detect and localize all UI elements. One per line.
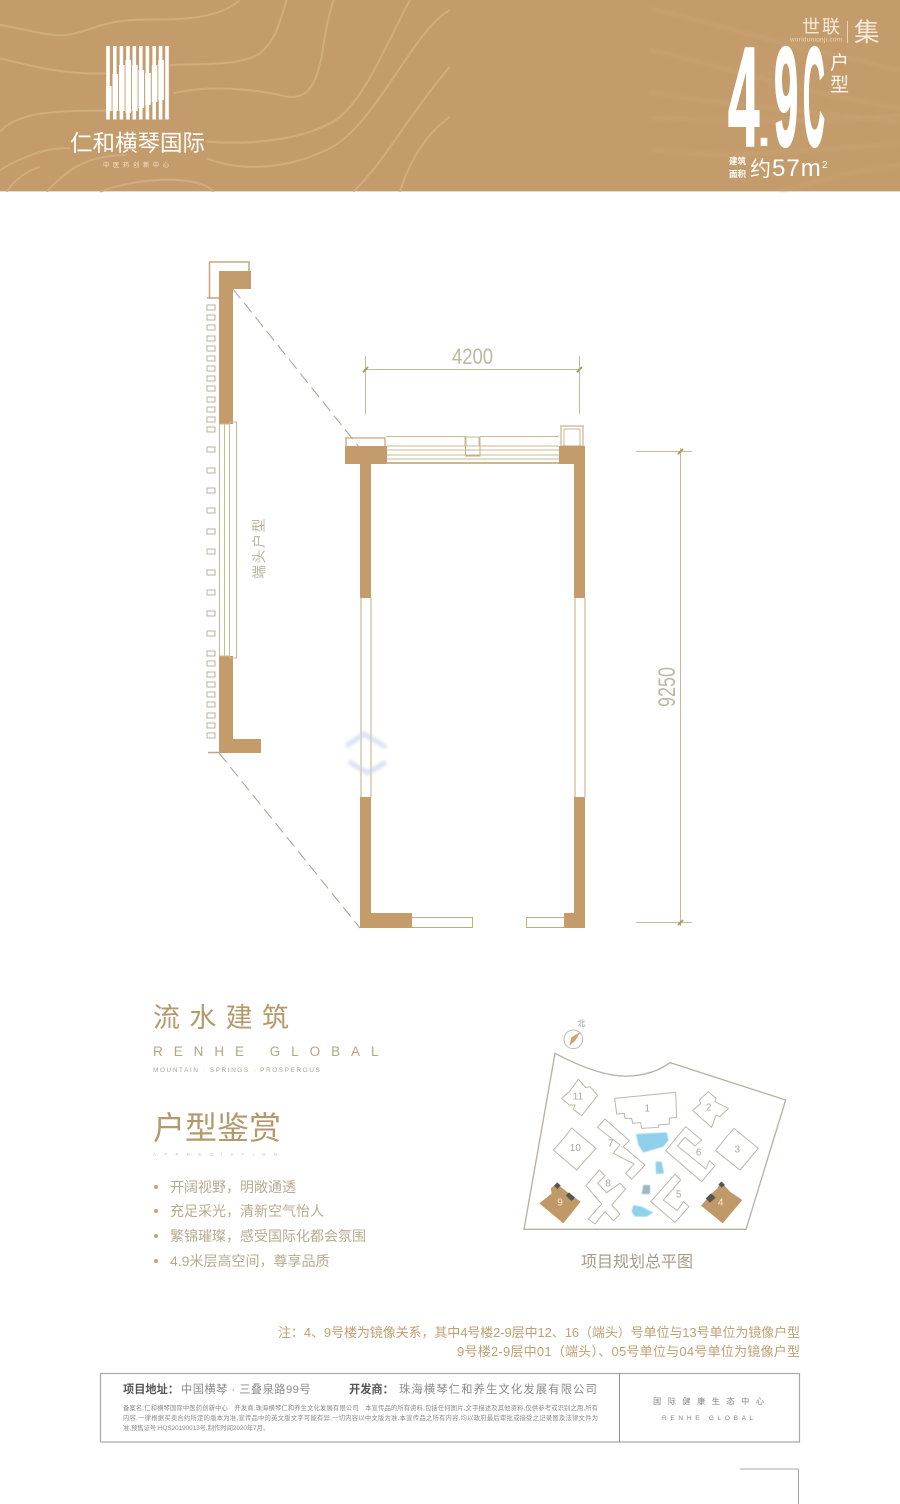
header banner [0, 0, 900, 192]
dimension: depth 9250 [636, 448, 692, 926]
footer right tagline: RENHE GLOBAL [662, 1415, 757, 1422]
building numbers: 8 [605, 1179, 611, 1190]
unit type number [728, 18, 825, 177]
project address and developer: 开发商： [349, 1382, 394, 1396]
logo wordmark [70, 131, 205, 169]
floor area: 面积 [729, 169, 747, 179]
building numbers: 1 [645, 1103, 651, 1114]
project address and developer: 珠海横琴仁和养生文化发展有限公司 [399, 1382, 598, 1396]
windows [361, 598, 585, 928]
building numbers: 7 [608, 1139, 614, 1150]
unit type number: 4 [728, 18, 760, 176]
site boundary [524, 1053, 786, 1229]
brand mark: 世联集: 集 [854, 19, 880, 47]
main floor plan [345, 426, 585, 928]
feature list: 充足采光，清新空气怡人 [170, 1203, 324, 1219]
highlighted buildings 9 and 4 [539, 1182, 742, 1223]
mirror unit note: 注：4、9号楼为镜像关系，其中4号楼2-9层中12、16（端头）号单位与13号单位为镜像户型 [278, 1325, 800, 1340]
building numbers: 4 [718, 1197, 724, 1208]
feature list: 繁锦璀璨，感受国际化都会氛围 [170, 1228, 366, 1244]
feature list [154, 1179, 366, 1269]
site plan caption: 项目规划总平图 [581, 1253, 693, 1271]
unit type label: 型 [830, 74, 849, 96]
unit type label: 户 [830, 52, 849, 74]
section heading: flowing water architecture: MOUNTAIN · SPRINGS · PROSPEROUS [153, 1067, 321, 1074]
footer right tagline: 国际健康生态中心 [653, 1396, 771, 1406]
mirror unit note [278, 1325, 800, 1359]
section heading: unit appreciation: 户型鉴赏 [153, 1110, 281, 1146]
project address and developer: 中国横琴 · 三叠泉路99号 [181, 1382, 311, 1396]
legal disclaimer: 准,预售证号:HQS20190013号,制作时间2020年7月。 [123, 1423, 269, 1432]
section heading: flowing water architecture: 流水建筑 [153, 1003, 298, 1033]
building numbers: 9 [557, 1197, 563, 1208]
building numbers: 3 [735, 1144, 741, 1155]
floor area [729, 155, 828, 182]
building numbers: 6 [696, 1148, 702, 1159]
brand mark: 世联集 [789, 17, 880, 47]
floor area: 约 [750, 158, 771, 181]
building numbers: 10 [570, 1143, 581, 1154]
section heading: flowing water architecture: RENHE GLOBAL [153, 1044, 389, 1059]
section heading: unit appreciation: APPRECIATION [153, 1152, 285, 1157]
feature list: 4.9米层高空间，尊享品质 [170, 1253, 329, 1269]
footer right tagline [653, 1396, 771, 1422]
watermark smudge [346, 734, 386, 773]
logo wordmark: 仁和横琴国际 [70, 131, 205, 156]
brand mark: 世联集: 世联 [802, 17, 842, 37]
walls [345, 446, 387, 598]
building numbers: 2 [706, 1103, 712, 1114]
floor area: 建筑 [729, 156, 747, 166]
footer info box [100, 1373, 800, 1442]
dimension: width 4200: 4200 [452, 346, 493, 369]
building numbers [557, 1091, 741, 1208]
end unit elevation plan [207, 262, 261, 753]
project address and developer: 项目地址： [123, 1382, 179, 1396]
unit type number: 9 [774, 20, 798, 177]
cropped lower frame [740, 1469, 798, 1504]
project address and developer [123, 1382, 598, 1396]
dashed projection lines [219, 289, 360, 928]
outline buildings [553, 1079, 758, 1224]
logo mark [106, 46, 169, 120]
feature list: 开阔视野，明敞通透 [170, 1179, 296, 1195]
water features [632, 1132, 669, 1217]
legal disclaimer: 备案名:仁和横琴国际中医药创新中心 开发商:珠海横琴仁和养生文化发展有限公司 本宣传品的所有资料,包括任何图片,文字描述及其他资料,仅供参考或识别之用,所有 [123, 1403, 598, 1412]
compass [564, 1019, 585, 1049]
dimension: depth 9250: 9250 [655, 667, 681, 707]
logo wordmark: 中医药创新中心 [103, 161, 173, 169]
floor area: 2 [822, 160, 828, 171]
dimension: width 4200 [363, 346, 582, 414]
legal disclaimer: 内容,一律根据买卖合约所定的版本为准,宣传品中的英文版文字可能有异,一切内容以中文版为准,本宣传品之所有内容,均以政府最后审批或接受之记录图及法律文件为 [123, 1413, 598, 1422]
unit type number: . [758, 96, 770, 158]
site master plan [524, 1019, 786, 1229]
legal disclaimer [123, 1403, 598, 1432]
building numbers: 5 [676, 1189, 682, 1200]
balcony [346, 426, 583, 463]
building numbers: 11 [573, 1091, 584, 1102]
floor area: 57m [772, 155, 822, 182]
unit type number: C [803, 18, 825, 176]
compass: 北 [577, 1019, 585, 1028]
section heading: flowing water architecture [153, 1003, 389, 1074]
brand mark: 世联集: worldunionji.com [789, 36, 842, 44]
label: end unit: 端头户型 [251, 517, 267, 579]
mirror unit note: 9号楼2-9层中01（端头）、05号单位与04号单位为镜像户型 [457, 1344, 800, 1359]
unit type label [830, 52, 849, 96]
